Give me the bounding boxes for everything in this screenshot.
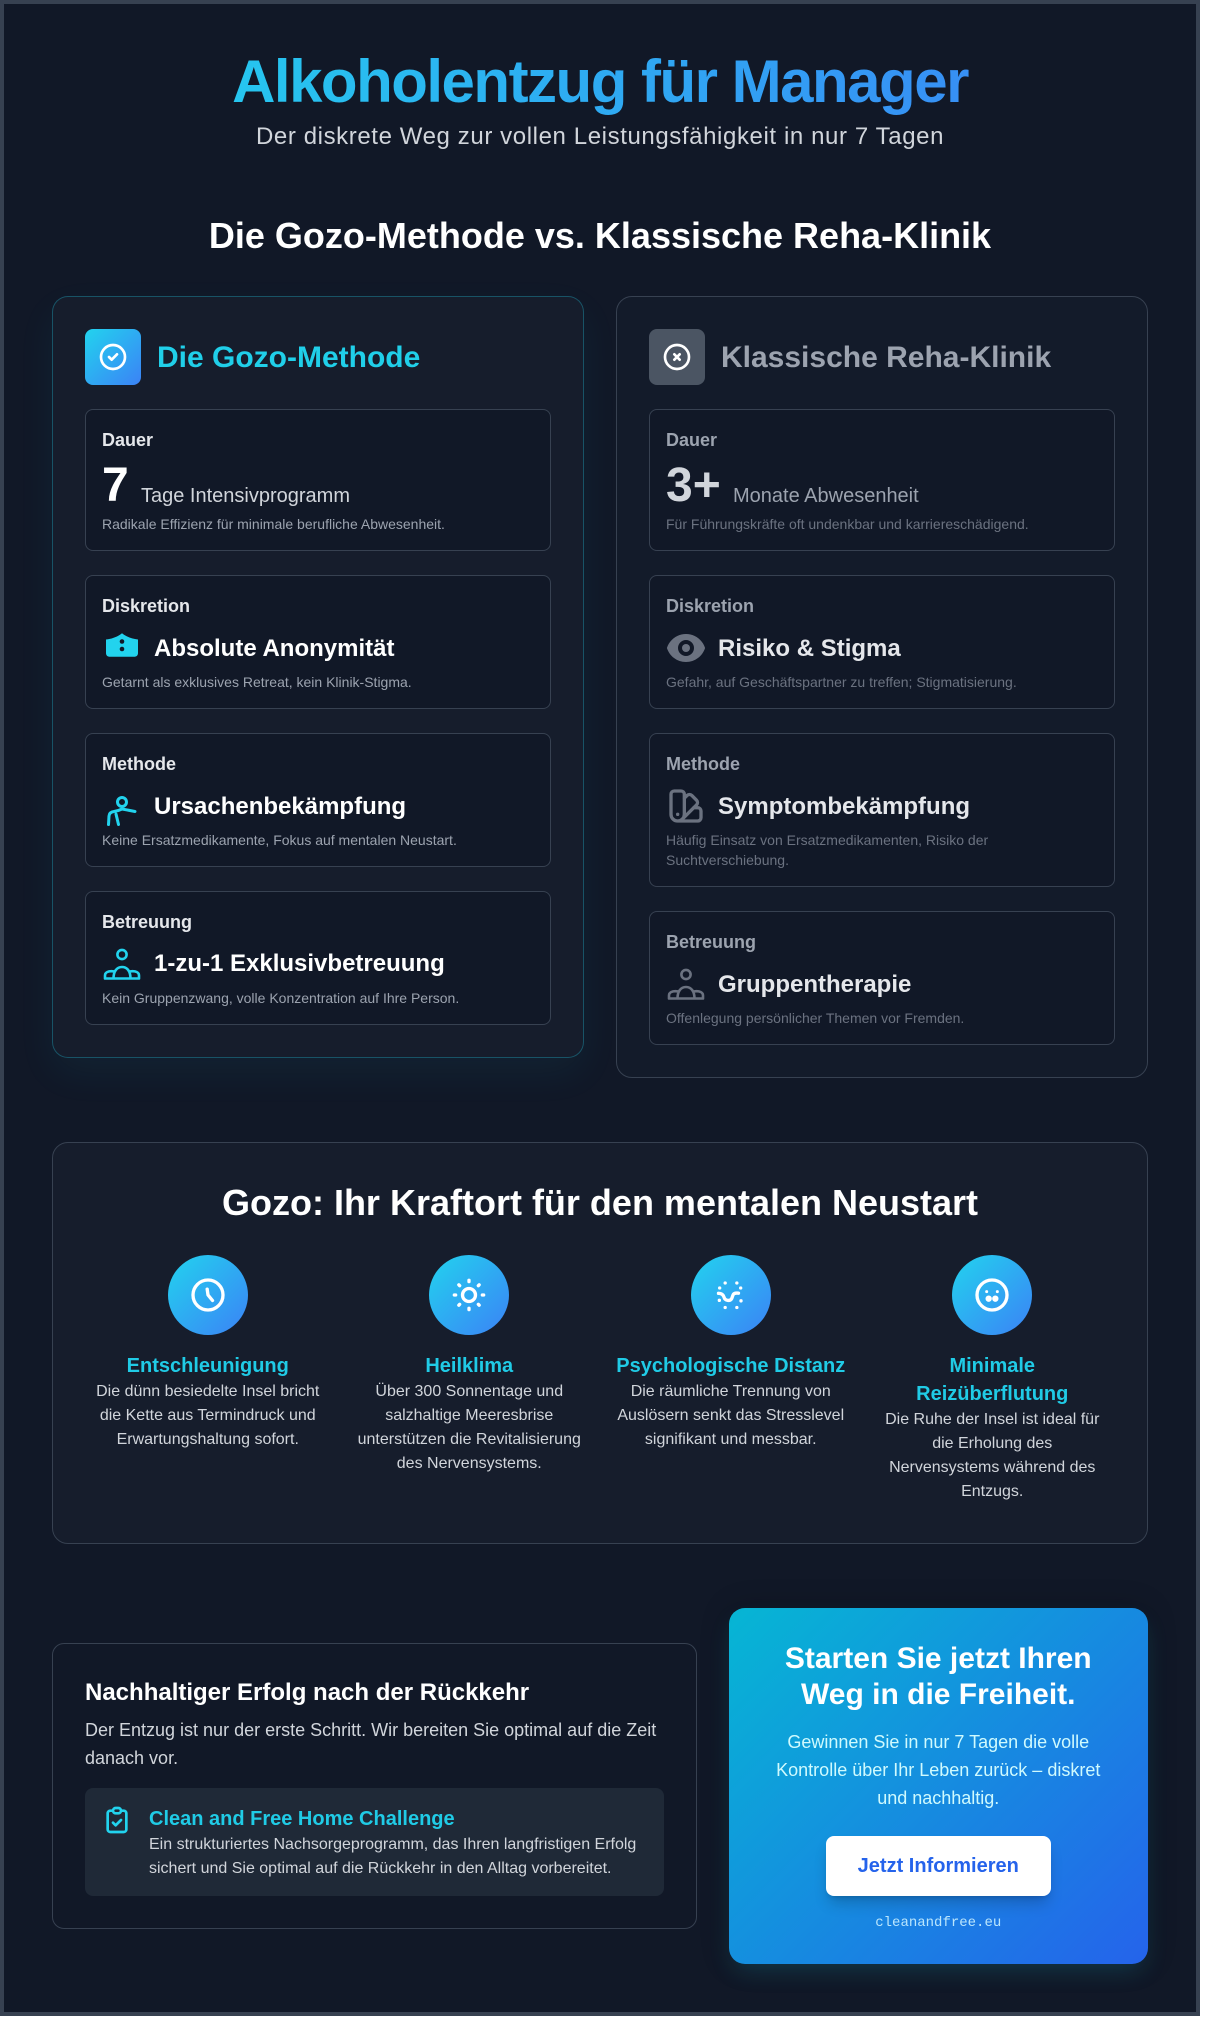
label: Betreuung [666, 932, 756, 952]
card: Methode [85, 733, 551, 867]
CTA text: Gewinnen Sie in nur 7 Tagen die volle [787, 1732, 1089, 1752]
icon: person reaching [107, 796, 136, 826]
benefit text [617, 1383, 844, 1448]
icon: check circle [85, 329, 141, 385]
description: Gefahr, auf Geschäftspartner zu treffen; Stigmatisierung. [666, 674, 1017, 690]
card: Methode [649, 733, 1115, 887]
CTA heading: Starten Sie jetzt Ihren [785, 1642, 1092, 1674]
icon: group [668, 968, 704, 1000]
panel heading: clinic: Klassische Reha-Klinik [721, 340, 1051, 374]
benefit text [358, 1382, 581, 1472]
benefit text: Über 300 Sonnentage und [375, 1383, 563, 1400]
title [52, 52, 1148, 122]
card: Diskretion [649, 575, 1115, 709]
icon: clock [168, 1255, 248, 1335]
panel heading: Gozo: Die Gozo-Methode [157, 340, 420, 374]
value text: Absolute Anonymität [154, 634, 394, 662]
CTA text: Kontrolle über Ihr Leben zurück – diskret [776, 1760, 1100, 1780]
callout text: Ein strukturiertes Nachsorgeprogramm, das Ihren langfristigen Erfolg [149, 1836, 636, 1852]
value text: Tage Intensivprogramm [141, 485, 350, 507]
value text: Risiko & Stigma [718, 634, 901, 662]
label: Diskretion [102, 596, 190, 616]
icon: eye [667, 634, 705, 662]
icon: color swatch [669, 789, 703, 823]
icon: wave with dots [691, 1255, 771, 1335]
description: Kein Gruppenzwang, volle Konzentration auf Ihre Person. [102, 990, 459, 1006]
benefit text: signifikant und messbar. [645, 1431, 817, 1448]
description: Suchtverschiebung. [666, 852, 789, 868]
heading: Gozo: Gozo: Ihr Kraftort für den mentalen Neustart [222, 1182, 978, 1222]
benefit: Psychologische Distanz [616, 1255, 845, 1448]
description: Getarnt als exklusives Retreat, kein Klinik-Stigma. [102, 674, 412, 690]
title: Alkoholentzug für Manager [232, 48, 968, 115]
label: Methode [102, 754, 176, 774]
panel: call to action [728, 1608, 1148, 1964]
benefit text [96, 1383, 320, 1448]
intro text: Der Entzug ist nur der erste Schritt. Wir bereiten Sie optimal auf die Zeit [85, 1720, 656, 1740]
CTA button: Jetzt Informieren [858, 1855, 1019, 1877]
card: Dauer [649, 409, 1115, 551]
value text: Ursachenbekämpfung [154, 792, 406, 820]
card: Diskretion [85, 575, 551, 709]
value text: Monate Abwesenheit [733, 485, 919, 507]
number: 7: 7 [102, 459, 129, 512]
benefit title: Reizüberflutung [916, 1383, 1068, 1405]
benefit title [916, 1355, 1068, 1405]
benefit title: Entschleunigung [127, 1355, 289, 1377]
benefit: Heilklima [358, 1255, 581, 1472]
value text: Gruppentherapie [718, 970, 911, 998]
heading: comparison: Die Gozo-Methode vs. Klassische Reha-Klinik [209, 214, 991, 256]
panel: Gozo benefits [52, 1142, 1148, 1544]
benefit: Entschleunigung [96, 1255, 320, 1448]
icon: person one-to-one [104, 948, 140, 980]
website: cleanandfree.eu [875, 1915, 1001, 1931]
CTA text: und nachhaltig. [877, 1788, 999, 1808]
CTA heading [785, 1642, 1092, 1710]
benefit text: des Nervensystems. [397, 1455, 542, 1472]
panel: Gozo method [52, 296, 584, 1058]
label: Dauer [666, 430, 717, 450]
benefit text: Die Ruhe der Insel ist ideal für [885, 1411, 1099, 1428]
description: Radikale Effizienz für minimale berufliche Abwesenheit. [102, 516, 445, 532]
benefit text: Nervensystems während des [889, 1459, 1095, 1476]
number: 3+: 3+ [666, 459, 721, 512]
card: Betreuung [85, 891, 551, 1025]
description: Häufig Einsatz von Ersatzmedikamenten, Risiko der [666, 832, 988, 848]
benefit title: Heilklima [425, 1355, 513, 1377]
icon: clipboard check [106, 1806, 128, 1834]
panel: classic rehab clinic [616, 296, 1148, 1078]
benefit text: Erwartungshaltung sofort. [117, 1431, 299, 1448]
description: Keine Ersatzmedikamente, Fokus auf mentalen Neustart. [102, 832, 457, 848]
label: Diskretion [666, 596, 754, 616]
label: Dauer [102, 430, 153, 450]
benefit: Minimale Reizüberflutung [885, 1255, 1100, 1500]
subtitle: Der diskrete Weg zur vollen Leistungsfähigkeit in nur 7 Tagen [256, 122, 944, 150]
benefit text: die Kette aus Termindruck und [100, 1407, 316, 1424]
benefit text: salzhaltige Meeresbrise [385, 1407, 553, 1424]
card: Betreuung [649, 911, 1115, 1045]
value text: Symptombekämpfung [718, 792, 970, 820]
label: Methode [666, 754, 740, 774]
benefit title: Psychologische Distanz [616, 1355, 845, 1377]
description: Für Führungskräfte oft undenkbar und karriereschädigend. [666, 516, 1029, 532]
intro text: danach vor. [85, 1748, 178, 1768]
panel: sustainable success [52, 1643, 696, 1929]
callout text: sichert und Sie optimal auf die Rückkehr in den Alltag vorbereitet. [149, 1860, 611, 1876]
value text: 1-zu-1 Exklusivbetreuung [154, 950, 445, 976]
benefit text: Die dünn besiedelte Insel bricht [96, 1383, 319, 1400]
callout text [149, 1836, 636, 1876]
icon: sun [429, 1255, 509, 1335]
benefit title: Minimale [949, 1355, 1035, 1377]
intro text [85, 1720, 656, 1768]
icon: shield [106, 633, 138, 657]
CTA text [776, 1732, 1100, 1808]
benefit text: Entzugs. [961, 1483, 1023, 1500]
CTA heading: Weg in die Freiheit. [801, 1678, 1075, 1710]
benefit text [885, 1411, 1100, 1500]
heading: success: Nachhaltiger Erfolg nach der Rückkehr [85, 1678, 529, 1706]
benefit text: Die räumliche Trennung von [631, 1383, 831, 1400]
icon: face [952, 1255, 1032, 1335]
callout: home challenge [85, 1788, 664, 1896]
description [666, 832, 988, 868]
description: Offenlegung persönlicher Themen vor Fremden. [666, 1010, 964, 1026]
benefit text: Auslösern senkt das Stresslevel [617, 1407, 844, 1424]
CTA button [826, 1836, 1051, 1896]
card: Dauer [85, 409, 551, 551]
label: Betreuung [102, 912, 192, 932]
icon: x circle [649, 329, 705, 385]
benefit text: unterstützen die Revitalisierung [358, 1431, 581, 1448]
benefit text: die Erholung des [932, 1435, 1052, 1452]
callout title: Clean and Free Home Challenge [149, 1808, 455, 1830]
